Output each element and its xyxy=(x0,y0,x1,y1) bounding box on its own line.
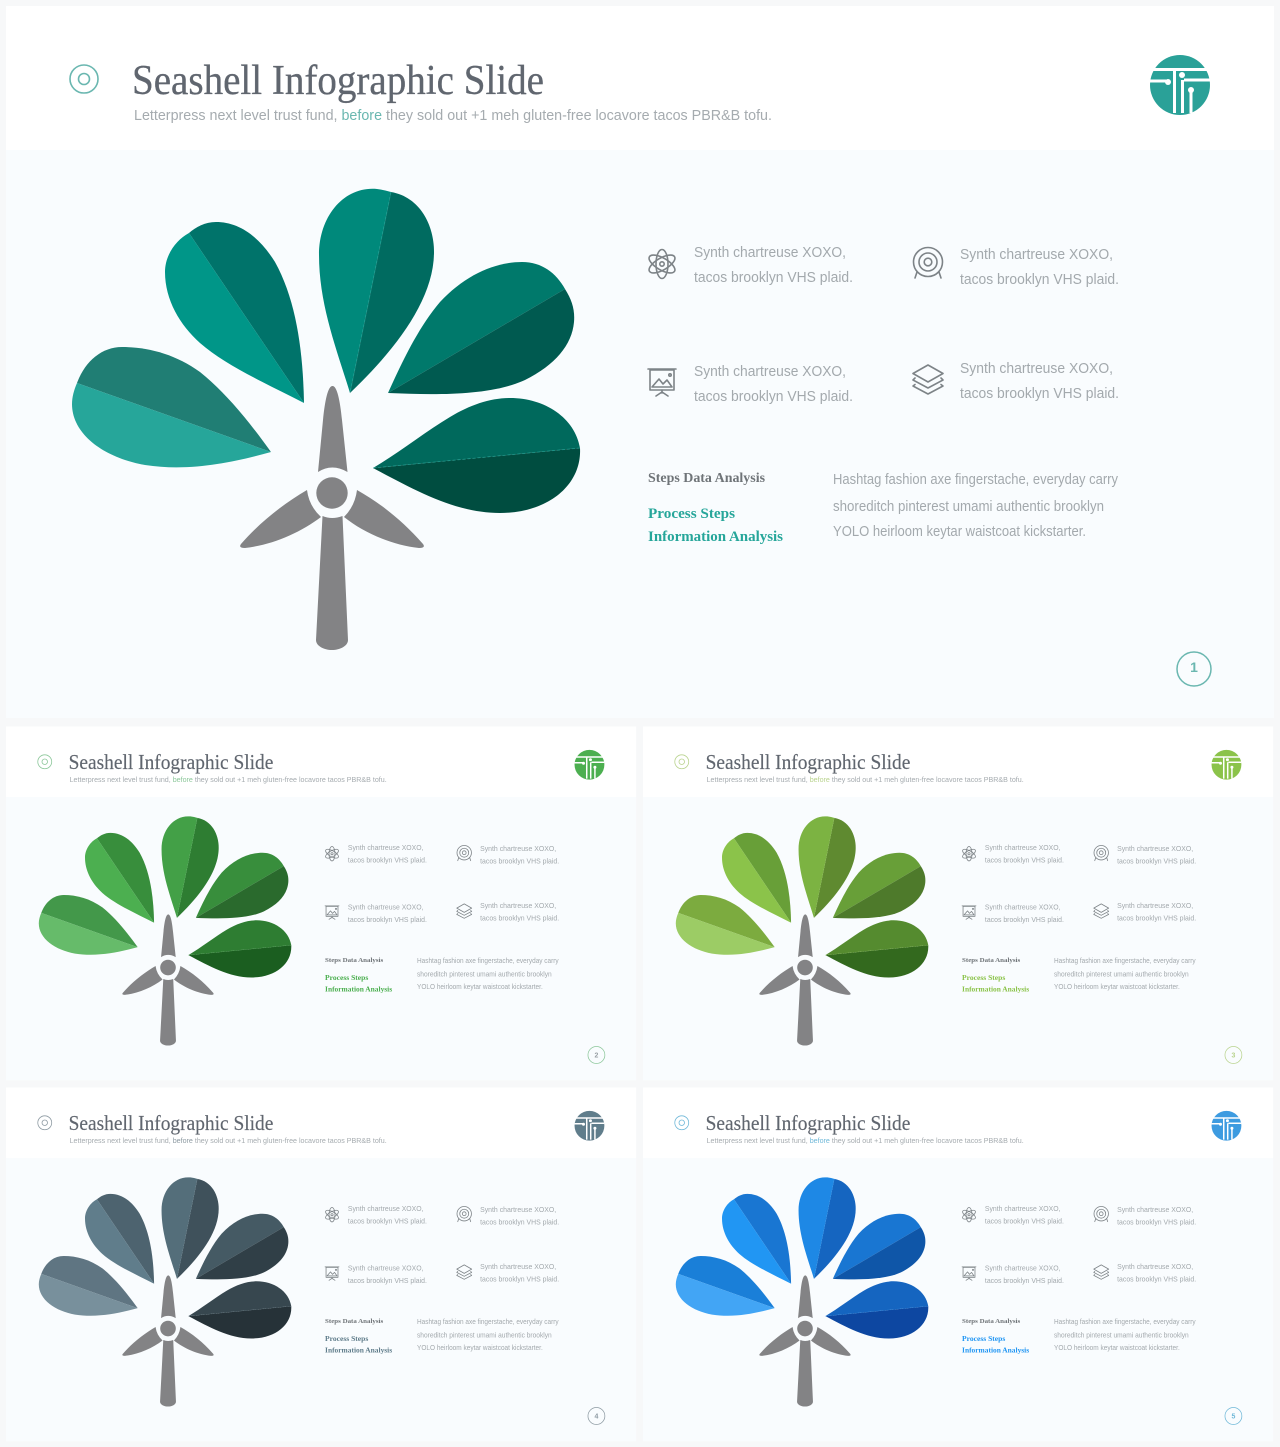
text: item 2: tacos brooklyn VHS plaid. xyxy=(1117,857,1196,866)
title: Seashell Infographic Slide xyxy=(132,58,544,104)
process heading: Information Analysis xyxy=(325,984,392,993)
text: item 3: Synth chartreuse XOXO, xyxy=(985,1263,1060,1272)
slide 1: teal, large xyxy=(6,6,1274,718)
page number: 2 xyxy=(594,1052,598,1059)
icon: layers xyxy=(1094,1265,1109,1279)
tree diagram xyxy=(676,1177,928,1407)
body panel xyxy=(6,797,636,1080)
process heading: Information Analysis xyxy=(648,529,783,545)
header panel xyxy=(643,726,1273,797)
paragraph: Hashtag fashion axe fingerstache, everyday carry xyxy=(417,956,559,965)
process heading: Information Analysis xyxy=(325,1345,392,1354)
text: item 2: Synth chartreuse XOXO, xyxy=(960,247,1113,263)
icon: bullseye xyxy=(70,65,98,93)
paragraph: shoreditch pinterest umami authentic brooklyn xyxy=(1054,969,1189,978)
text: item 3: Synth chartreuse XOXO, xyxy=(348,1263,423,1272)
text: item 4: Synth chartreuse XOXO, xyxy=(1117,901,1193,910)
petal 2 xyxy=(722,1194,791,1284)
icon: atom xyxy=(961,847,977,861)
text: item 2: tacos brooklyn VHS plaid. xyxy=(480,1218,559,1227)
subtitle: Letterpress next level trust fund, before they sold out +1 meh gluten-free locavore tacos PBR&B tofu. xyxy=(707,1136,1024,1145)
icon: presentation board xyxy=(962,906,976,919)
petal 1 xyxy=(72,347,271,467)
petal 3 xyxy=(162,816,219,918)
text: item 1: Synth chartreuse XOXO, xyxy=(985,843,1060,852)
page number: 5 xyxy=(1231,1413,1235,1420)
petal 2 xyxy=(85,1194,154,1284)
icon: bullseye xyxy=(38,1116,52,1130)
text: item 3: tacos brooklyn VHS plaid. xyxy=(985,1276,1064,1285)
icon: atom xyxy=(324,847,340,861)
petal 3 xyxy=(162,1177,219,1279)
paragraph: shoreditch pinterest umami authentic brooklyn xyxy=(417,1330,552,1339)
logo xyxy=(575,750,604,780)
header panel xyxy=(643,1087,1273,1158)
paragraph: YOLO heirloom keytar waistcoat kickstarter. xyxy=(417,1343,543,1352)
steps heading: Steps Data Analysis xyxy=(962,1318,1021,1325)
icon: layers xyxy=(457,904,472,918)
tree diagram xyxy=(39,816,291,1046)
icon: presentation board xyxy=(325,906,339,919)
tree diagram xyxy=(39,1177,291,1407)
petal 5 xyxy=(825,1281,928,1338)
subtitle: Letterpress next level trust fund, before they sold out +1 meh gluten-free locavore tacos PBR&B tofu. xyxy=(70,775,387,784)
title: Seashell Infographic Slide xyxy=(69,1111,273,1135)
wind turbine xyxy=(759,1275,851,1407)
icon: presentation board xyxy=(648,369,676,396)
text: item 4: tacos brooklyn VHS plaid. xyxy=(1117,1274,1196,1283)
page number: 1 xyxy=(1190,659,1198,675)
process heading: Information Analysis xyxy=(962,1345,1029,1354)
text: item 4: Synth chartreuse XOXO, xyxy=(960,361,1113,377)
text: item 1: tacos brooklyn VHS plaid. xyxy=(985,856,1064,865)
text: item 4: tacos brooklyn VHS plaid. xyxy=(1117,913,1196,922)
tree diagram xyxy=(72,189,580,650)
body panel xyxy=(643,1158,1273,1441)
text: item 1: tacos brooklyn VHS plaid. xyxy=(985,1217,1064,1226)
paragraph: shoreditch pinterest umami authentic brooklyn xyxy=(833,499,1104,515)
wind turbine xyxy=(759,914,851,1046)
icon: atom xyxy=(961,1208,977,1222)
paragraph: shoreditch pinterest umami authentic brooklyn xyxy=(1054,1330,1189,1339)
title: Seashell Infographic Slide xyxy=(706,1111,910,1135)
slide 2: green xyxy=(6,726,636,1080)
body panel xyxy=(643,797,1273,1080)
petal 4 xyxy=(388,262,574,394)
petal 4 xyxy=(196,1214,288,1279)
icon: target xyxy=(1094,846,1108,861)
text: item 3: Synth chartreuse XOXO, xyxy=(694,364,846,380)
petal 1 xyxy=(39,1256,138,1316)
text: item 2: Synth chartreuse XOXO, xyxy=(480,844,556,853)
petal 3 xyxy=(319,189,434,393)
body panel xyxy=(6,150,1274,718)
process heading: Process Steps xyxy=(648,506,735,522)
text: item 4: tacos brooklyn VHS plaid. xyxy=(480,913,559,922)
petal 2 xyxy=(722,833,791,923)
process heading: Process Steps xyxy=(962,1334,1005,1343)
petal 4 xyxy=(196,853,288,918)
header panel xyxy=(6,726,636,797)
petal 5 xyxy=(188,1281,291,1338)
page number xyxy=(588,1408,605,1424)
paragraph: YOLO heirloom keytar waistcoat kickstarter. xyxy=(833,524,1086,540)
text: item 1: Synth chartreuse XOXO, xyxy=(694,245,846,261)
title: Seashell Infographic Slide xyxy=(706,750,910,774)
paragraph: YOLO heirloom keytar waistcoat kickstarter. xyxy=(417,982,543,991)
text: item 1: Synth chartreuse XOXO, xyxy=(348,843,423,852)
petal 5 xyxy=(188,920,291,977)
petal 1 xyxy=(676,895,775,955)
text: item 4: Synth chartreuse XOXO, xyxy=(480,1262,556,1271)
logo xyxy=(1212,1111,1241,1141)
icon: target xyxy=(457,846,471,861)
icon: target xyxy=(914,248,942,278)
page number xyxy=(1225,1047,1242,1063)
petal 4 xyxy=(833,853,925,918)
page number xyxy=(1177,652,1211,686)
header panel xyxy=(6,6,1274,150)
text: item 2: tacos brooklyn VHS plaid. xyxy=(1117,1218,1196,1227)
body panel xyxy=(6,1158,636,1441)
petal 1 xyxy=(676,1256,775,1316)
header panel xyxy=(6,1087,636,1158)
icon: layers xyxy=(457,1265,472,1279)
page number xyxy=(1225,1408,1242,1424)
tree diagram xyxy=(676,816,928,1046)
paragraph: YOLO heirloom keytar waistcoat kickstarter. xyxy=(1054,982,1180,991)
text: item 3: tacos brooklyn VHS plaid. xyxy=(348,1276,427,1285)
petal 2 xyxy=(85,833,154,923)
icon: target xyxy=(457,1207,471,1222)
process heading: Process Steps xyxy=(325,1334,368,1343)
logo xyxy=(1150,55,1210,115)
text: item 3: Synth chartreuse XOXO, xyxy=(985,902,1060,911)
steps heading: Steps Data Analysis xyxy=(325,957,384,964)
text: item 2: tacos brooklyn VHS plaid. xyxy=(960,272,1119,288)
petal 3 xyxy=(799,816,856,918)
icon: presentation board xyxy=(325,1267,339,1280)
text: item 2: Synth chartreuse XOXO, xyxy=(480,1205,556,1214)
icon: bullseye xyxy=(675,1116,689,1130)
petal 5 xyxy=(373,398,580,513)
paragraph: Hashtag fashion axe fingerstache, everyday carry xyxy=(833,472,1119,488)
icon: atom xyxy=(324,1208,340,1222)
slide 3: lime xyxy=(643,726,1273,1080)
text: item 4: tacos brooklyn VHS plaid. xyxy=(960,386,1119,402)
text: item 3: tacos brooklyn VHS plaid. xyxy=(348,915,427,924)
icon: bullseye xyxy=(675,755,689,769)
subtitle: Letterpress next level trust fund, before they sold out +1 meh gluten-free locavore tacos PBR&B tofu. xyxy=(134,108,772,124)
subtitle: Letterpress next level trust fund, before they sold out +1 meh gluten-free locavore tacos PBR&B tofu. xyxy=(707,775,1024,784)
petal 4 xyxy=(833,1214,925,1279)
subtitle: Letterpress next level trust fund, before they sold out +1 meh gluten-free locavore tacos PBR&B tofu. xyxy=(70,1136,387,1145)
petal 2 xyxy=(165,222,304,403)
petal 5 xyxy=(825,920,928,977)
steps heading: Steps Data Analysis xyxy=(648,470,765,485)
icon: presentation board xyxy=(962,1267,976,1280)
page number xyxy=(588,1047,605,1063)
icon: layers xyxy=(1094,904,1109,918)
page number: 4 xyxy=(594,1413,598,1420)
slide 4: blue grey xyxy=(6,1087,636,1441)
process heading: Process Steps xyxy=(325,973,368,982)
text: item 3: tacos brooklyn VHS plaid. xyxy=(694,389,853,405)
text: item 1: tacos brooklyn VHS plaid. xyxy=(694,270,853,286)
text: item 4: Synth chartreuse XOXO, xyxy=(480,901,556,910)
text: item 2: Synth chartreuse XOXO, xyxy=(1117,844,1193,853)
text: item 1: tacos brooklyn VHS plaid. xyxy=(348,1217,427,1226)
process heading: Information Analysis xyxy=(962,984,1029,993)
wind turbine xyxy=(122,914,214,1046)
logo xyxy=(575,1111,604,1141)
petal 1 xyxy=(39,895,138,955)
paragraph: YOLO heirloom keytar waistcoat kickstarter. xyxy=(1054,1343,1180,1352)
paragraph: Hashtag fashion axe fingerstache, everyday carry xyxy=(417,1317,559,1326)
icon: bullseye xyxy=(38,755,52,769)
steps heading: Steps Data Analysis xyxy=(325,1318,384,1325)
text: item 2: Synth chartreuse XOXO, xyxy=(1117,1205,1193,1214)
text: item 2: tacos brooklyn VHS plaid. xyxy=(480,857,559,866)
text: item 3: Synth chartreuse XOXO, xyxy=(348,902,423,911)
page number: 3 xyxy=(1231,1052,1235,1059)
paragraph: shoreditch pinterest umami authentic brooklyn xyxy=(417,969,552,978)
paragraph: Hashtag fashion axe fingerstache, everyday carry xyxy=(1054,956,1196,965)
steps heading: Steps Data Analysis xyxy=(962,957,1021,964)
text: item 1: Synth chartreuse XOXO, xyxy=(348,1204,423,1213)
text: item 1: tacos brooklyn VHS plaid. xyxy=(348,856,427,865)
text: item 1: Synth chartreuse XOXO, xyxy=(985,1204,1060,1213)
paragraph: Hashtag fashion axe fingerstache, everyday carry xyxy=(1054,1317,1196,1326)
text: item 3: tacos brooklyn VHS plaid. xyxy=(985,915,1064,924)
text: item 4: tacos brooklyn VHS plaid. xyxy=(480,1274,559,1283)
wind turbine xyxy=(240,386,424,650)
petal 3 xyxy=(799,1177,856,1279)
slide 5: blue xyxy=(643,1087,1273,1441)
title: Seashell Infographic Slide xyxy=(69,750,273,774)
process heading: Process Steps xyxy=(962,973,1005,982)
wind turbine xyxy=(122,1275,214,1407)
icon: atom xyxy=(646,250,678,278)
icon: target xyxy=(1094,1207,1108,1222)
icon: layers xyxy=(913,365,943,394)
text: item 4: Synth chartreuse XOXO, xyxy=(1117,1262,1193,1271)
logo xyxy=(1212,750,1241,780)
